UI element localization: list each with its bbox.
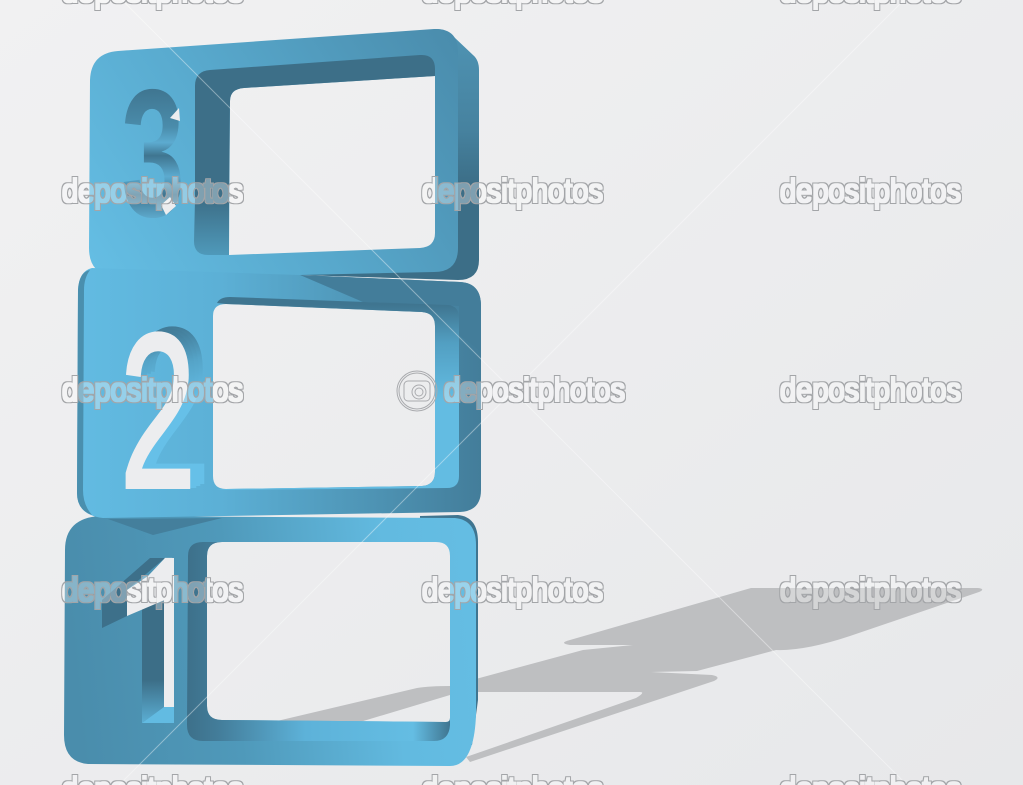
- box 3 recess wall lower: [194, 200, 229, 255]
- icon: watermark camera: [397, 371, 437, 411]
- number 2: 2: [120, 287, 196, 534]
- number 2 wall: 2: [134, 282, 210, 529]
- box 3: [89, 29, 479, 280]
- watermark grid: depositphotos: [780, 172, 961, 209]
- watermark grid: depositphotos: [422, 172, 603, 209]
- box 2: [77, 268, 481, 534]
- number 1: 1: [142, 507, 191, 775]
- box 1: [64, 507, 478, 775]
- number 3: 3: [121, 52, 185, 255]
- watermark grid: depositphotos: [62, 371, 243, 408]
- watermark grid: depositphotos: [62, 571, 243, 608]
- watermark grid: depositphotos: [62, 172, 243, 209]
- shadow from box 2 on box 1: [108, 518, 222, 535]
- box 1 right rim: [420, 515, 478, 745]
- shadow from box 3 on box 2: [300, 275, 481, 351]
- box 3 recess wall: [195, 55, 435, 200]
- cast shadow: [277, 588, 982, 762]
- number 2 wall: 2: [130, 284, 206, 531]
- watermark grid: depositphotos: [780, 371, 961, 408]
- number 2 wall: 2: [126, 286, 202, 533]
- box 2 recess ledge: [216, 297, 459, 490]
- watermark grid: depositphotos: [780, 571, 961, 608]
- box 3 side: [300, 29, 479, 280]
- box 1 front face: [64, 516, 476, 766]
- number 1 wall: [102, 558, 174, 723]
- watermark grid: depositphotos: [422, 571, 603, 608]
- number 1: [127, 558, 174, 707]
- box 1 recess wall: [187, 542, 450, 741]
- watermark grid: depositphotos: [444, 371, 625, 408]
- box 2 left edge shading: [77, 270, 92, 515]
- box 2 body: [77, 268, 481, 518]
- watermark lines: [119, 0, 907, 785]
- number 3 light fragments: [161, 108, 180, 215]
- box 3 front face: [89, 29, 458, 276]
